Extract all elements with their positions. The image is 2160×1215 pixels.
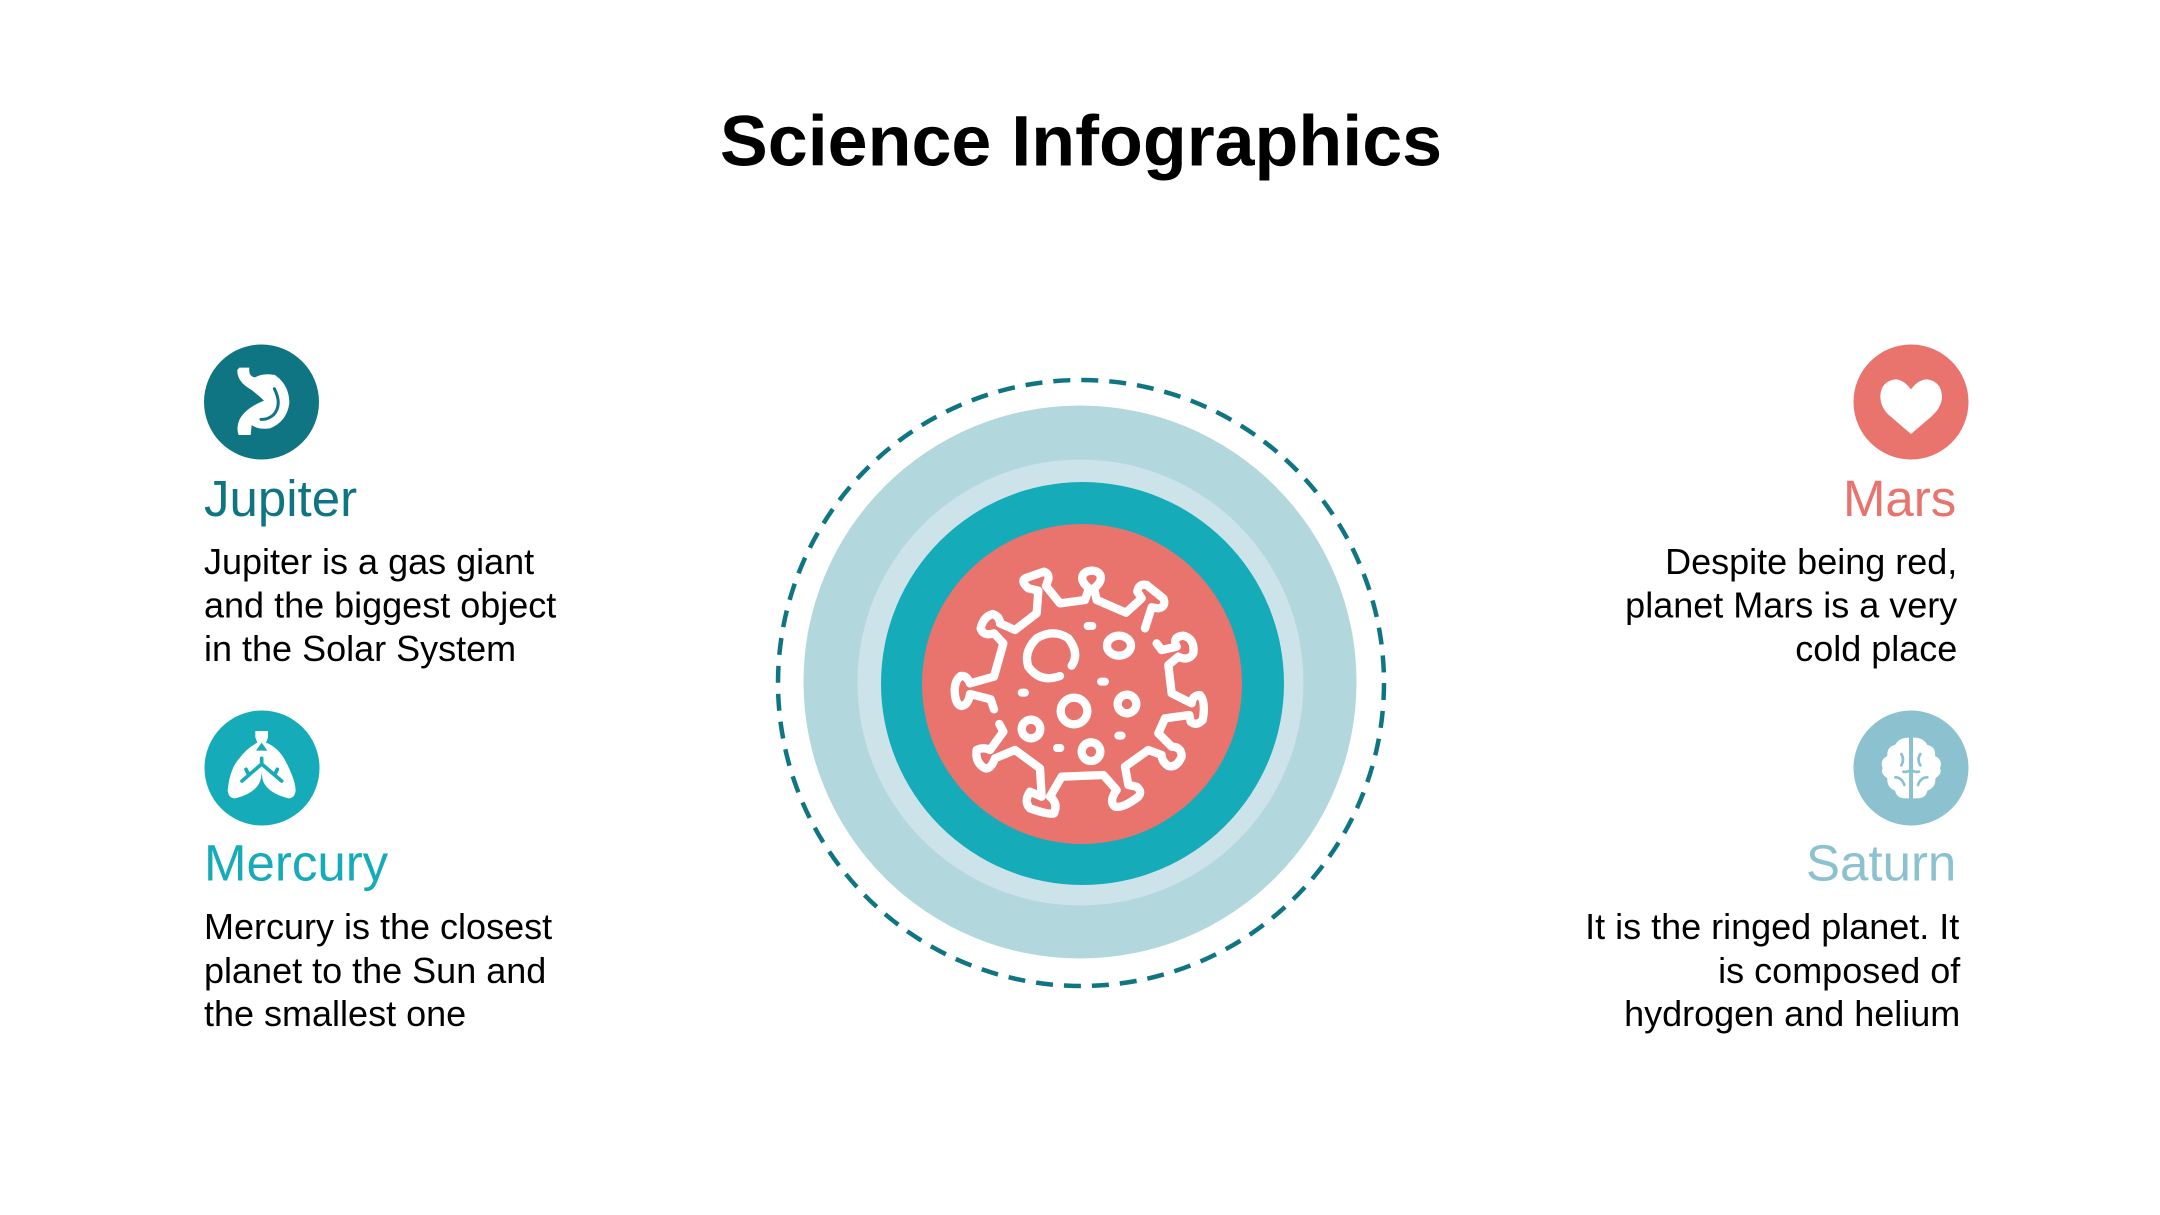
text: Mars description: planet Mars is a very <box>1625 584 1957 626</box>
teal ring <box>881 482 1284 885</box>
panel: Saturn <box>1585 710 1968 1034</box>
heading: Mars: Mars <box>1843 470 1956 527</box>
central concentric circle diagram <box>778 380 1384 986</box>
icon: heart <box>1854 344 1968 460</box>
text: Jupiter description: and the biggest object <box>204 584 556 626</box>
heading: Mercury: Mercury <box>204 834 389 892</box>
coral core <box>922 524 1242 844</box>
text: Saturn description: hydrogen and helium <box>1624 993 1960 1034</box>
text: Jupiter description: Jupiter is a gas giant <box>204 541 534 582</box>
panel: Mars <box>1625 344 1968 669</box>
text: Jupiter description: in the Solar System <box>204 628 516 669</box>
pale ring <box>858 460 1304 906</box>
title: Science Infographics <box>720 102 1442 182</box>
icon: stomach <box>204 344 319 460</box>
outer light ring <box>804 406 1356 958</box>
dashed outer ring <box>778 380 1384 986</box>
heading: Jupiter: Jupiter <box>204 470 357 527</box>
text: Mars description: Despite being red, <box>1665 541 1957 582</box>
panel: Mercury <box>204 710 552 1034</box>
text: Saturn description: It is the ringed planet. It <box>1585 906 1959 947</box>
heading: Saturn: Saturn <box>1806 834 1956 892</box>
text: Mercury description: the smallest one <box>204 993 466 1034</box>
text: Mars description: cold place <box>1795 628 1957 669</box>
icon: virus <box>955 571 1204 814</box>
panel: Jupiter <box>204 344 556 669</box>
icon: lungs <box>204 710 320 826</box>
text: Mercury description: Mercury is the closest <box>204 906 552 947</box>
icon: brain <box>1854 710 1968 826</box>
text: Saturn description: is composed of <box>1718 950 1961 991</box>
text: Mercury description: planet to the Sun and <box>204 950 546 991</box>
